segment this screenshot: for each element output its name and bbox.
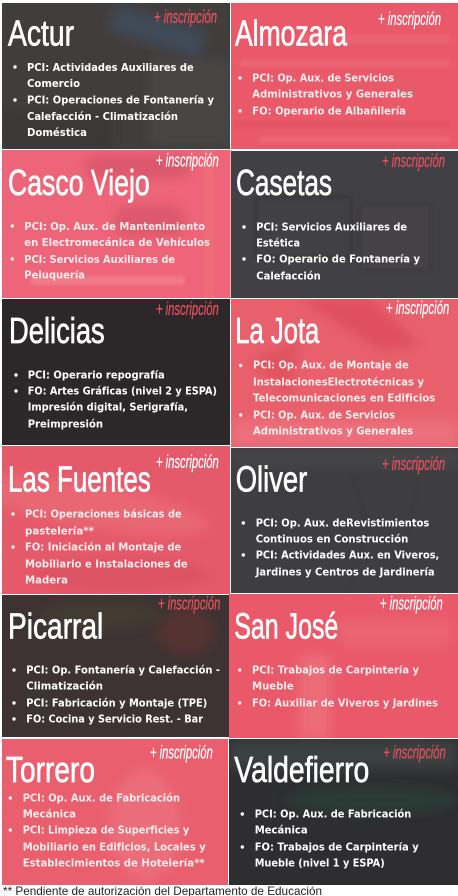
panel: Las Fuentes xyxy=(0,446,230,594)
list: Casco Viejo courses: PCI: Op. Aux. de Mantenimiento xyxy=(24,220,205,233)
list: Casco Viejo courses: Peluquería xyxy=(24,269,85,282)
title: Delicias: Delicias xyxy=(9,310,105,351)
link: inscripción: + inscripción xyxy=(156,452,219,472)
list: La Jota courses xyxy=(239,359,436,438)
list: San José courses: PCI: Trabajos de Carpintería y xyxy=(252,664,419,677)
list: Actur courses: Comercio xyxy=(27,77,80,90)
list: Casco Viejo courses: en Electromecánica de Vehículos xyxy=(24,236,210,249)
list: San José courses xyxy=(238,664,438,710)
list: Oliver courses: PCI: Op. Aux. deRevistimientos xyxy=(256,517,430,530)
title: Las Fuentes: Las Fuentes xyxy=(8,458,151,499)
title: Torrero: Torrero xyxy=(6,749,95,790)
list: Valdefierro courses: Mecánica xyxy=(255,824,308,837)
list: La Jota courses: Telecomunicaciones en Edificios xyxy=(253,392,436,405)
list: Actur courses: Calefacción - Climatización xyxy=(27,110,178,123)
list: Oliver courses: Continuos en Construcción xyxy=(256,533,408,546)
list: Casetas courses: Calefacción xyxy=(256,269,321,282)
panel: Casco Viejo xyxy=(2,150,230,298)
list: Torrero courses: Mecánica xyxy=(23,808,76,821)
list: San José courses: FO: Auxiliar de Viveros y Jardines xyxy=(252,697,438,710)
list: Torrero courses: PCI: Op. Aux. de Fabricación xyxy=(23,792,180,805)
title: Picarral: Picarral xyxy=(8,605,103,646)
list: Casco Viejo courses: PCI: Servicios Auxiliares de xyxy=(24,253,175,266)
list: Almozara courses: PCI: Op. Aux. de Servicios xyxy=(252,72,394,85)
list: Delicias courses: PCI: Operario repografía xyxy=(28,369,165,382)
list: La Jota courses: Administrativos y Generales xyxy=(253,425,414,438)
panel: Torrero xyxy=(2,739,228,885)
link: inscripción: + inscripción xyxy=(158,593,220,613)
list: Casetas courses: PCI: Servicios Auxiliares de xyxy=(256,221,407,234)
panel: Valdefierro xyxy=(229,739,458,885)
list: Picarral courses: FO: Cocina y Servicio Rest. - Bar xyxy=(26,713,203,726)
list: Actur courses: PCI: Actividades Auxiliares de xyxy=(27,61,194,74)
list: Valdefierro courses: PCI: Op. Aux. de Fabricación xyxy=(255,808,411,821)
title: Almozara: Almozara xyxy=(235,13,348,54)
list: Almozara courses xyxy=(238,72,413,118)
title: Oliver: Oliver xyxy=(236,458,307,499)
list: Las Fuentes courses xyxy=(11,508,188,587)
title: Casetas: Casetas xyxy=(236,162,332,203)
panel: Actur xyxy=(2,3,230,149)
list: La Jota courses: InstalacionesElectrotécnicas y xyxy=(253,376,424,389)
panel: Delicias xyxy=(2,299,230,445)
link: inscripción: + inscripción xyxy=(154,7,217,27)
list: Picarral courses: PCI: Fabricación y Montaje (TPE) xyxy=(26,697,207,710)
title: La Jota: La Jota xyxy=(235,310,320,351)
list: Torrero courses: Mobiliario en Edificios, Locales y xyxy=(23,841,206,854)
list: Oliver courses: Jardines y Centros de Jardinería xyxy=(255,566,435,579)
list: Casetas courses: Estética xyxy=(256,237,300,250)
list: Almozara courses: FO: Operario de Albañilería xyxy=(252,105,406,118)
panel: Casetas xyxy=(231,151,458,298)
panel: San José xyxy=(229,593,458,738)
list: Torrero courses xyxy=(9,792,206,870)
list: La Jota courses: PCI: Op. Aux. de Montaje de xyxy=(253,359,409,372)
list: Casco Viejo courses xyxy=(11,220,210,282)
list: Las Fuentes courses: PCI: Operaciones básicas de xyxy=(25,508,182,521)
list: Las Fuentes courses: Madera xyxy=(25,574,68,587)
panel: Almozara xyxy=(231,3,458,149)
list: Casetas courses xyxy=(242,221,420,282)
list: La Jota courses: PCI: Op. Aux. de Servicios xyxy=(253,409,395,422)
list: Las Fuentes courses: Mobiliario e Instalaciones de xyxy=(25,558,188,571)
list: Valdefierro courses: FO: Trabajos de Carpintería y xyxy=(255,841,419,854)
list: Delicias courses: FO: Artes Gráficas (nivel 2 y ESPA) xyxy=(28,385,217,398)
list: Delicias courses: Preimpresión xyxy=(28,418,103,431)
panel: La Jota xyxy=(231,298,458,447)
list: Casetas courses: FO: Operario de Fontanería y xyxy=(256,253,420,266)
list: Almozara courses: Administrativos y Generales xyxy=(252,88,413,101)
list: Torrero courses: PCI: Limpieza de Superficies y xyxy=(23,824,189,837)
panel: Oliver xyxy=(231,448,458,593)
list: Valdefierro courses xyxy=(241,808,419,870)
list: Delicias courses: Impresión digital, Serigrafía, xyxy=(28,401,188,414)
panel: Picarral xyxy=(2,593,229,737)
list: Oliver courses: PCI: Actividades Aux. en Viveros, xyxy=(256,549,439,562)
title: Casco Viejo: Casco Viejo xyxy=(8,162,150,203)
link: inscripción: + inscripción xyxy=(150,742,213,762)
list: Oliver courses xyxy=(242,517,439,579)
list: Valdefierro courses: Mueble (nivel 1 y ESPA) xyxy=(255,857,385,870)
list: Las Fuentes courses: FO: Iniciación al Montaje de xyxy=(25,541,181,554)
list: Picarral courses: Climatización xyxy=(26,680,103,693)
list: Torrero courses: Establecimientos de Hotelería** xyxy=(23,857,205,870)
list: Actur courses: Doméstica xyxy=(27,126,87,139)
list: Actur courses: PCI: Operaciones de Fontanería y xyxy=(27,94,214,106)
list: San José courses: Mueble xyxy=(252,680,294,693)
list: Picarral courses xyxy=(12,664,220,726)
list: Actur courses xyxy=(13,61,214,139)
title: Actur: Actur xyxy=(8,13,74,54)
list: Delicias courses xyxy=(14,369,217,431)
title: Valdefierro: Valdefierro xyxy=(234,749,369,790)
title: San José: San José xyxy=(234,605,338,646)
link: inscripción: + inscripción xyxy=(156,299,219,319)
list: Las Fuentes courses: pastelería** xyxy=(25,525,94,538)
link: inscripción: + inscripción xyxy=(156,151,219,171)
list: Picarral courses: PCI: Op. Fontanería y Calefacción - xyxy=(26,664,220,677)
